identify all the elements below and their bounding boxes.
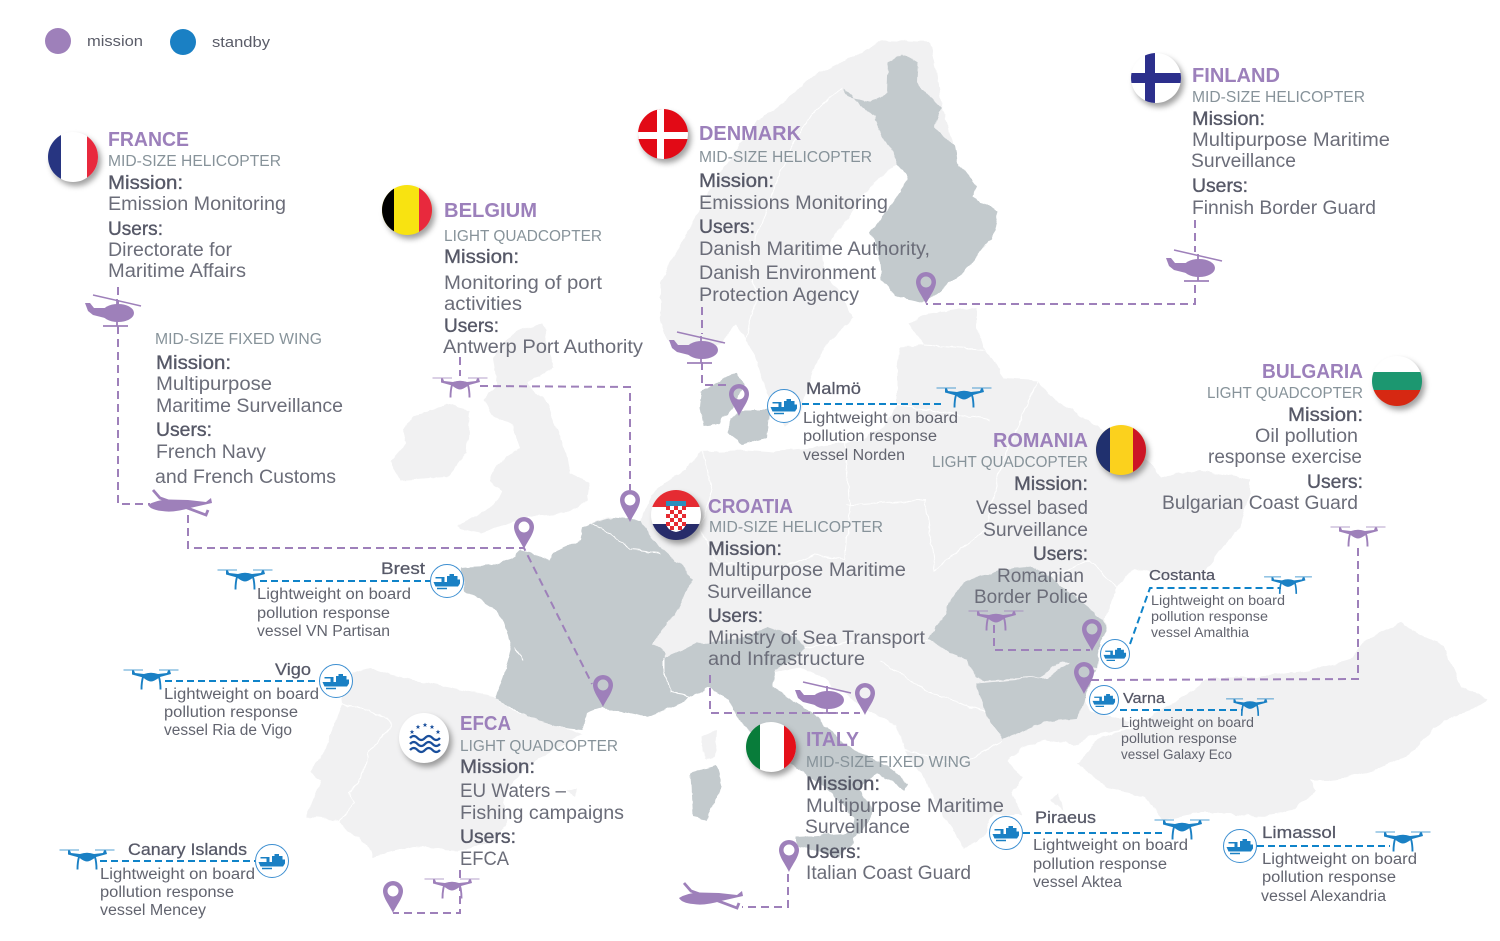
aircraft type: MID-SIZE HELICOPTER xyxy=(108,153,281,170)
highlighted: Finland xyxy=(842,54,998,303)
users xyxy=(699,217,930,306)
mission xyxy=(805,774,1004,838)
land: Iberia xyxy=(307,667,583,857)
connector: Denmark helicopter to pin xyxy=(702,307,730,385)
icon: quadcopter EFCA xyxy=(424,879,480,898)
users: Users: xyxy=(1192,176,1248,197)
users: and French Customs xyxy=(155,467,336,488)
users: Directorate for xyxy=(108,240,233,261)
callout: Varna: Varna xyxy=(1123,691,1166,707)
icon: vessel Costanta xyxy=(1100,640,1130,668)
callout: Costanta xyxy=(1149,568,1285,640)
aircraft type: MID-SIZE HELICOPTER xyxy=(699,149,872,166)
connector: Varna standby xyxy=(1120,709,1242,711)
mission: Mission: xyxy=(708,539,782,560)
highlighted: Sicily xyxy=(797,833,853,857)
connector: Vigo standby xyxy=(165,680,320,682)
callout: Brest: pollution response xyxy=(257,605,390,622)
callout: Brest: vessel VN Partisan xyxy=(257,623,390,640)
users xyxy=(443,316,644,358)
connector: Canary Islands standby xyxy=(100,860,256,862)
callout: Canary Islands: pollution response xyxy=(100,884,234,901)
callout: Malmö: Malmö xyxy=(806,380,861,398)
land: Ireland xyxy=(390,403,470,480)
panel: Belgium xyxy=(443,200,644,358)
aircraft type: MID-SIZE HELICOPTER xyxy=(1192,89,1365,106)
connector: Italy pin to fixed wing xyxy=(742,874,788,907)
users xyxy=(806,842,971,884)
connector: Romania drone to pin xyxy=(994,625,1090,650)
land: continental Europe xyxy=(582,307,1250,848)
highlighted: Romania xyxy=(927,567,1109,680)
icon: drone Vigo xyxy=(124,670,178,690)
users: Finnish Border Guard xyxy=(1192,198,1376,219)
mission: Fishing campaigns xyxy=(460,803,624,824)
aircraft type: LIGHT QUADCOPTER xyxy=(460,738,618,755)
icon: fixed wing France xyxy=(148,490,212,515)
icon: helicopter Finland xyxy=(1166,250,1222,281)
callout: Malmö: pollution response xyxy=(803,428,937,445)
icon: fixed wing Italy xyxy=(679,883,743,908)
pin: Croatia xyxy=(855,683,875,715)
icon: vessel Varna xyxy=(1090,686,1118,714)
heading: BULGARIA xyxy=(1262,361,1363,383)
callout: Piraeus: vessel Aktea xyxy=(1033,874,1122,891)
callout: Costanta: vessel Amalthia xyxy=(1151,625,1250,640)
pin: France Mediterranean xyxy=(593,675,613,707)
icon: drone Varna xyxy=(1226,699,1274,716)
pin: Bulgaria xyxy=(1074,662,1094,694)
users: Users: xyxy=(699,217,755,238)
connector: Croatia to pin xyxy=(710,675,860,713)
icon: vessel Limassol xyxy=(1224,830,1256,862)
panel: Italy xyxy=(805,729,1004,884)
icon: drone Canary Islands xyxy=(60,850,114,870)
mission: Mission: xyxy=(699,171,774,192)
flag: Finland xyxy=(1131,53,1184,107)
callout: Brest: Lightweight on board xyxy=(257,586,411,603)
mission: Mission: xyxy=(1014,474,1088,495)
icon: helicopter France xyxy=(85,295,141,326)
panel: Finland xyxy=(1191,65,1390,219)
pin: Denmark xyxy=(729,384,749,416)
aircraft icons xyxy=(60,250,1430,908)
callout: Canary Islands: Canary Islands xyxy=(128,841,247,859)
mission: Mission: xyxy=(460,757,535,778)
users: Users: xyxy=(708,606,763,627)
callout: Canary Islands xyxy=(100,841,255,919)
callout: Piraeus: Piraeus xyxy=(1035,809,1096,827)
aircraft type: MID-SIZE FIXED WING xyxy=(155,331,322,348)
callout: Piraeus: pollution response xyxy=(1033,856,1167,873)
icon: helicopter Denmark xyxy=(669,332,725,363)
users: Danish Environment xyxy=(699,263,877,284)
mission xyxy=(156,353,343,417)
users: Ministry of Sea Transport xyxy=(708,628,926,649)
aircraft type: LIGHT QUADCOPTER xyxy=(444,228,602,245)
heading: FINLAND xyxy=(1192,65,1280,87)
flag: Belgium xyxy=(382,185,435,239)
callout: Limassol: Limassol xyxy=(1262,824,1336,842)
mission xyxy=(976,474,1088,541)
legend: standby: standby xyxy=(212,34,271,51)
highlighted: France and Belgium xyxy=(461,517,694,730)
highlighted: Sardinia xyxy=(690,765,723,820)
callout: Vigo: Vigo xyxy=(275,661,311,679)
mission: Monitoring of port xyxy=(444,273,603,294)
icon: drone Limassol xyxy=(1376,832,1430,852)
panel: Romania xyxy=(932,430,1088,608)
pin: Spain xyxy=(383,881,403,913)
connector: Bulgaria drone to pin xyxy=(1090,548,1358,680)
callout: Malmö: vessel Norden xyxy=(803,447,905,464)
flag: Bulgaria xyxy=(1372,356,1425,410)
users: Users: xyxy=(806,842,861,863)
users: Users: xyxy=(108,219,163,240)
users xyxy=(155,420,336,488)
flag: Romania xyxy=(1096,425,1149,479)
users: French Navy xyxy=(156,442,267,463)
users xyxy=(974,544,1088,608)
pin: Romania xyxy=(1082,619,1102,651)
connector: Costanta standby xyxy=(1130,588,1281,644)
panel: Bulgaria xyxy=(1162,361,1363,514)
mission xyxy=(1191,109,1390,172)
panel: EFCA xyxy=(460,713,624,870)
heading: CROATIA xyxy=(708,496,793,518)
land: Corsica and islands xyxy=(565,730,1062,810)
legend: mission: mission xyxy=(87,33,143,50)
heading: FRANCE xyxy=(108,129,189,151)
panel: France fixed wing xyxy=(155,331,343,488)
callout: Canary Islands: vessel Mencey xyxy=(100,902,206,919)
aircraft type: LIGHT QUADCOPTER xyxy=(1207,385,1363,402)
users: and Infrastructure xyxy=(708,649,865,670)
callout: Costanta: Costanta xyxy=(1149,568,1216,584)
highlighted: Italy xyxy=(664,627,908,840)
callout: Brest: Brest xyxy=(381,560,425,578)
flag: Croatia xyxy=(651,490,704,544)
mission: Multipurpose Maritime xyxy=(806,796,1004,817)
aircraft type: MID-SIZE HELICOPTER xyxy=(709,519,883,536)
mission: Mission: xyxy=(108,173,183,194)
mission: Mission: xyxy=(444,247,519,268)
aircraft type: MID-SIZE FIXED WING xyxy=(806,754,971,771)
users: Users: xyxy=(1307,472,1363,493)
users xyxy=(460,827,516,870)
callout: Varna: pollution response xyxy=(1121,731,1237,746)
land: Scandinavia xyxy=(660,40,958,427)
users xyxy=(708,606,926,670)
heading: DENMARK xyxy=(699,123,802,145)
icon: quadcopter Belgium xyxy=(432,378,488,398)
flag: Italy xyxy=(746,722,799,776)
mission xyxy=(444,247,603,315)
panel: Denmark xyxy=(699,123,930,306)
users: Users: xyxy=(156,420,212,441)
connector: French fixed wing to pins xyxy=(188,515,592,684)
panel: Croatia xyxy=(707,496,926,670)
callout: Vigo: pollution response xyxy=(164,704,298,721)
mission: Multipurpose xyxy=(156,374,272,395)
highlighted: Bulgaria xyxy=(976,662,1096,740)
connector: Finland helicopter to pin xyxy=(926,220,1195,304)
callout: Varna: vessel Galaxy Eco xyxy=(1121,747,1232,762)
heading: BELGIUM xyxy=(444,200,537,222)
icon: vessel Canary Islands xyxy=(256,844,288,878)
mission xyxy=(699,171,888,214)
users: Protection Agency xyxy=(699,285,860,306)
callout: Piraeus xyxy=(1033,809,1188,891)
callout: Vigo: vessel Ria de Vigo xyxy=(164,722,292,739)
map of Europe xyxy=(307,40,1488,857)
callout: Costanta: pollution response xyxy=(1151,609,1268,624)
mission xyxy=(108,173,286,215)
mission: response exercise xyxy=(1208,447,1362,468)
mission: Oil pollution xyxy=(1255,426,1358,447)
icon: vessel Brest xyxy=(430,564,464,598)
users: Italian Coast Guard xyxy=(806,863,971,884)
icon: vessel Piraeus xyxy=(990,816,1022,850)
connector: Piraeus standby xyxy=(1023,832,1165,834)
users: Danish Maritime Authority, xyxy=(699,239,930,260)
mission xyxy=(1208,405,1363,468)
connector: France helicopter to fixed wing xyxy=(118,287,150,504)
users: Users: xyxy=(460,827,516,848)
mission: Surveillance xyxy=(707,582,812,603)
panel: France helicopter xyxy=(108,129,286,282)
mission: Surveillance xyxy=(983,520,1088,541)
mission xyxy=(460,757,624,824)
highlighted: Denmark xyxy=(700,373,770,445)
connector: Malmö standby xyxy=(802,403,945,405)
users xyxy=(108,219,246,282)
pin: Italy xyxy=(779,840,799,872)
heading: EFCA xyxy=(460,713,511,735)
location pins xyxy=(383,272,1102,913)
mission xyxy=(707,539,906,603)
flag: France xyxy=(48,132,101,186)
legend xyxy=(45,28,271,55)
heading: ROMANIA xyxy=(993,430,1088,452)
pin: France Atlantic xyxy=(514,517,534,549)
callout: Varna: Lightweight on board xyxy=(1121,715,1254,730)
callout: Piraeus: Lightweight on board xyxy=(1033,837,1188,854)
icon: drone Piraeus xyxy=(1154,820,1210,840)
heading: ITALY xyxy=(806,729,860,751)
legend: mission xyxy=(45,28,143,54)
mission: Emissions Monitoring xyxy=(699,193,888,214)
callout: Limassol xyxy=(1261,824,1417,905)
mission: Surveillance xyxy=(1191,151,1296,172)
icon: quadcopter Romania xyxy=(968,611,1024,630)
callout: Varna xyxy=(1121,691,1254,762)
connector: Belgium drone to pin xyxy=(460,357,630,490)
mission: Multipurpose Maritime xyxy=(708,560,906,581)
icon: drone Brest xyxy=(218,570,272,590)
land: Great Britain xyxy=(457,323,590,533)
icon: vessel Malmö xyxy=(768,390,800,422)
connector: EFCA drone to pin xyxy=(393,870,460,913)
callout: Vigo xyxy=(164,661,319,739)
pin: Finland xyxy=(916,272,936,304)
users: Border Police xyxy=(974,587,1088,608)
callout: Costanta: Lightweight on board xyxy=(1151,593,1285,608)
connector: Limassol standby xyxy=(1257,845,1390,847)
mission: EU Waters – xyxy=(460,781,566,802)
land: Turkey xyxy=(1077,623,1488,820)
logo: EFCA xyxy=(399,713,452,767)
users: Bulgarian Coast Guard xyxy=(1162,493,1358,514)
callout: Limassol: pollution response xyxy=(1262,869,1396,886)
mission: Emission Monitoring xyxy=(108,194,286,215)
mission: Multipurpose Maritime xyxy=(1192,130,1390,151)
callout: Vigo: Lightweight on board xyxy=(164,686,319,703)
callout: Brest xyxy=(257,560,425,640)
callout: Limassol: Lightweight on board xyxy=(1262,851,1417,868)
users: EFCA xyxy=(460,849,509,870)
callout: Canary Islands: Lightweight on board xyxy=(100,866,255,883)
icon: drone Costanta xyxy=(1264,577,1312,594)
mission: activities xyxy=(444,294,522,315)
icon: helicopter Croatia xyxy=(795,682,851,713)
users: Romanian xyxy=(997,566,1084,587)
callout: Malmö: Lightweight on board xyxy=(803,410,958,427)
users: Users: xyxy=(1033,544,1088,565)
callout: Malmö xyxy=(803,380,958,464)
mission: Mission: xyxy=(1288,405,1363,426)
users: Maritime Affairs xyxy=(108,261,246,282)
mission: Mission: xyxy=(156,353,231,374)
mission: Maritime Surveillance xyxy=(156,396,343,417)
mission: Surveillance xyxy=(805,817,910,838)
callout: Limassol: vessel Alexandria xyxy=(1261,888,1386,905)
mission: Mission: xyxy=(806,774,880,795)
icon: quadcopter Bulgaria xyxy=(1330,527,1386,546)
users xyxy=(1192,176,1376,219)
vessel icons xyxy=(256,390,1256,878)
mission: Vessel based xyxy=(976,498,1088,519)
mission: Mission: xyxy=(1192,109,1265,130)
flag: Denmark xyxy=(638,109,691,163)
aircraft type: LIGHT QUADCOPTER xyxy=(932,454,1088,471)
users: Antwerp Port Authority xyxy=(443,337,644,358)
icon: vessel Vigo xyxy=(320,664,352,698)
users: Users: xyxy=(444,316,499,337)
connector: Brest standby xyxy=(260,580,430,582)
legend: standby xyxy=(170,29,271,55)
icon: drone Malmö xyxy=(936,388,992,408)
users xyxy=(1162,472,1363,514)
pin: Belgium xyxy=(620,490,640,522)
